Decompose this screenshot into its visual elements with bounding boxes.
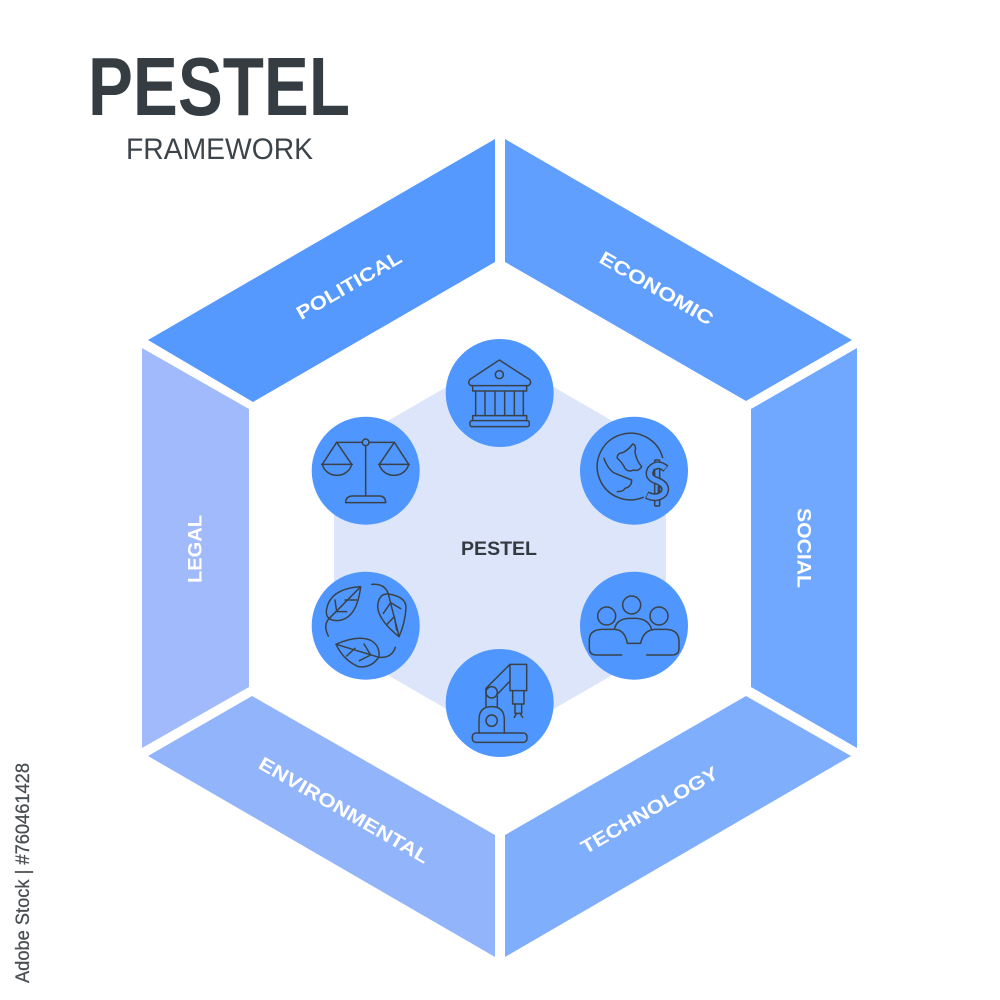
icon: social people (580, 572, 688, 680)
icon: environmental leaves (312, 572, 420, 680)
icon: technology robot arm (446, 649, 554, 757)
label: environmental: ENVIRONMENTAL (255, 754, 433, 869)
label: social: SOCIAL (792, 508, 814, 588)
label: political: POLITICAL (293, 247, 406, 325)
title: PESTEL (88, 40, 350, 133)
label: legal: LEGAL (186, 515, 206, 583)
center hexagon (334, 356, 666, 740)
icon: political bank (446, 339, 554, 447)
panel: legal (142, 348, 249, 748)
label: economic: ECONOMIC (595, 248, 717, 330)
panel: social (751, 348, 857, 748)
center label: PESTEL (461, 539, 537, 560)
icon: legal scales (312, 417, 420, 525)
panel: technology (505, 696, 851, 957)
icon: economic globe and dollar (580, 417, 688, 525)
subtitle: FRAMEWORK (126, 133, 313, 166)
panel: economic (505, 139, 852, 401)
label: technology: TECHNOLOGY (578, 763, 723, 859)
panel: environmental (148, 696, 495, 957)
panel: political (148, 139, 495, 402)
stock id strip: Adobe Stock | #760461428 (13, 763, 34, 983)
